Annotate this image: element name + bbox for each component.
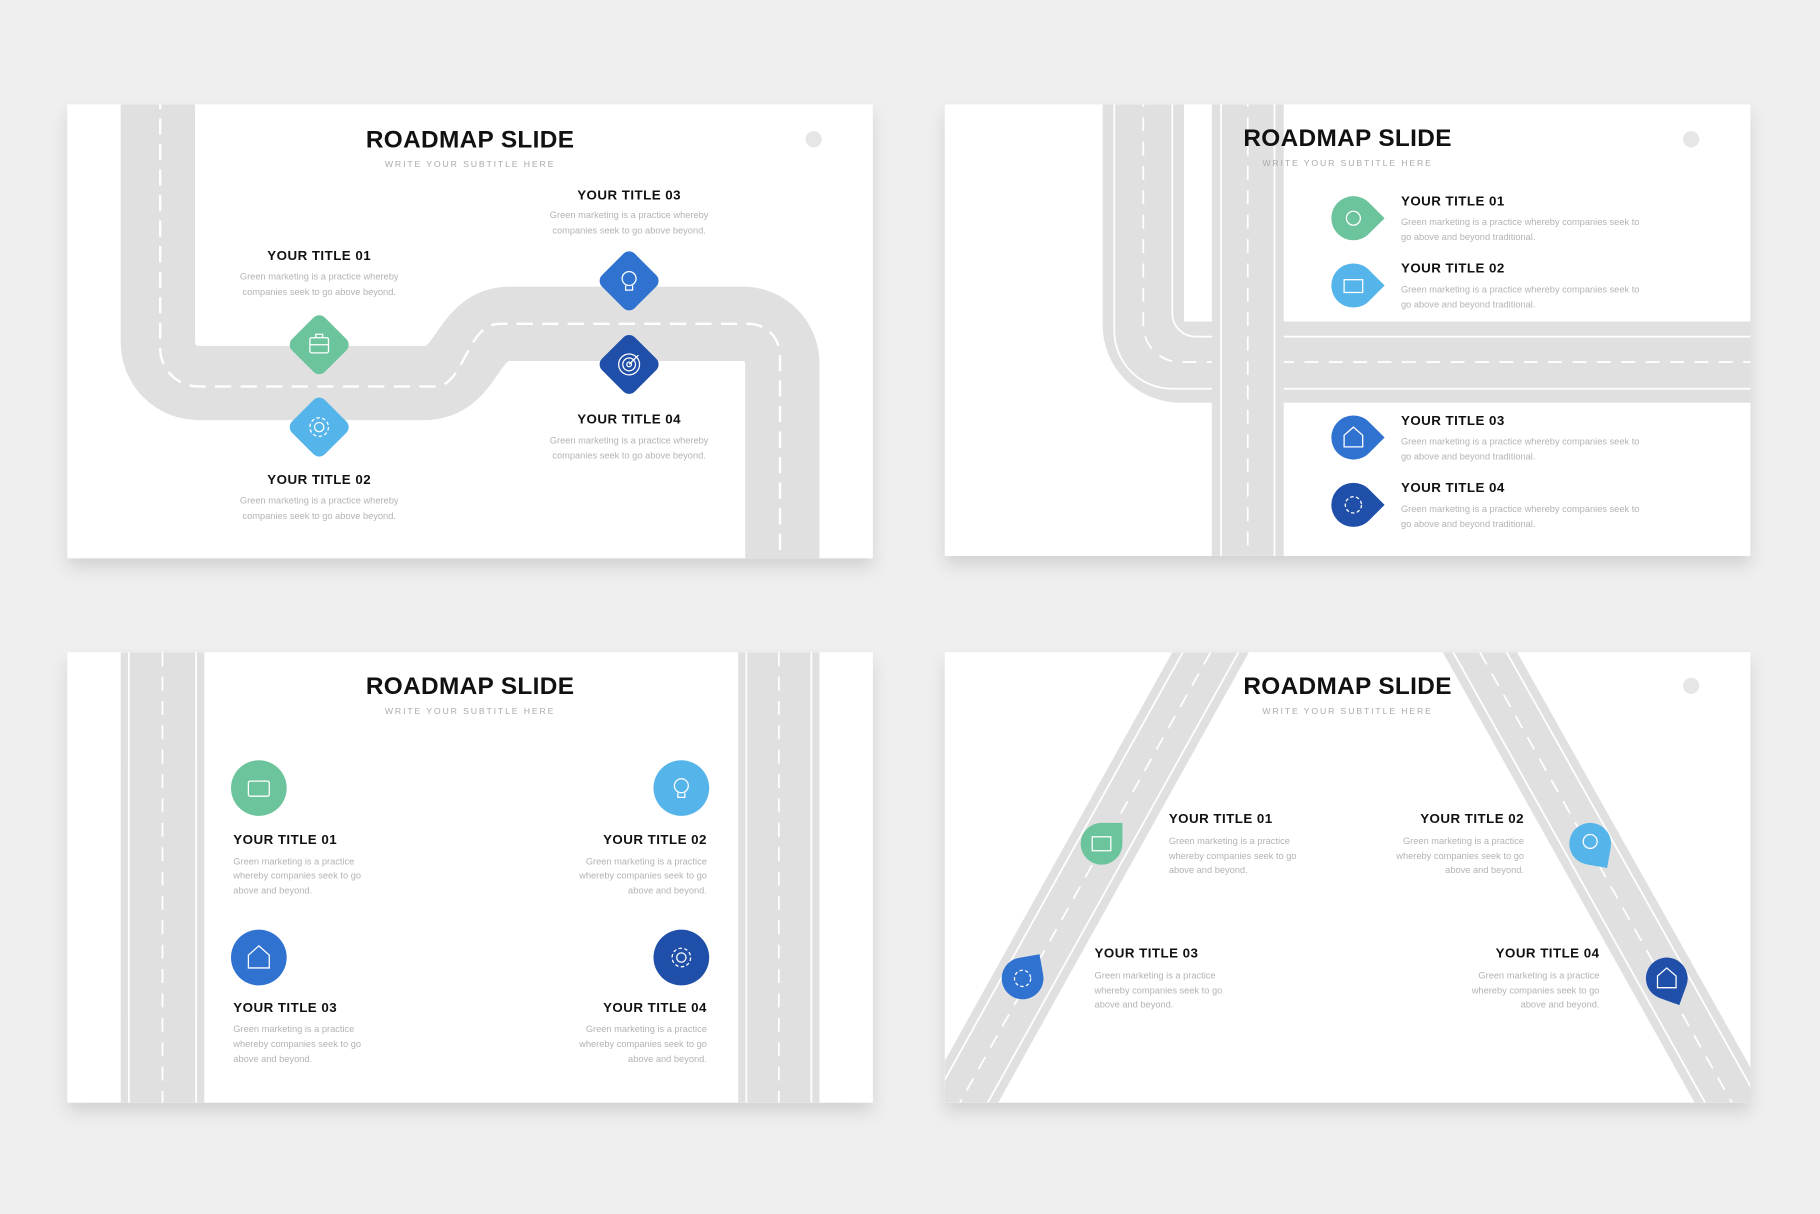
- text: title 02: above and beyond.: [1445, 865, 1524, 875]
- subtitle: WRITE YOUR SUBTITLE HERE: [1262, 158, 1433, 168]
- text: title 01: YOUR TITLE 01: [1169, 811, 1273, 826]
- icon: light blue circle: [653, 760, 709, 816]
- text: title 03: [550, 188, 709, 235]
- icon: light blue pin: [1322, 254, 1385, 317]
- icon: green pin: [1322, 187, 1385, 249]
- text: title 04: whereby companies seek to go: [1471, 985, 1599, 995]
- text: title 04: above and beyond.: [1521, 999, 1599, 1009]
- text: title 02: whereby companies seek to go: [1395, 851, 1524, 861]
- text: title 02: whereby companies seek to go: [578, 871, 707, 881]
- text: title 04: Green marketing is a practice: [586, 1024, 707, 1034]
- icon: light blue diamond gear: [286, 394, 352, 460]
- text: title 04: YOUR TITLE 04: [1401, 480, 1505, 495]
- icon: green diamond briefcase: [286, 312, 352, 378]
- text: title 01: YOUR TITLE 01: [1401, 193, 1505, 208]
- text: title 04: [1471, 946, 1600, 1009]
- text: title 03: Green marketing is a practice: [233, 1024, 354, 1034]
- icon: light blue pin: [1566, 820, 1614, 868]
- page number: [806, 131, 822, 147]
- page number: [1683, 131, 1699, 147]
- text: title 01: Green marketing is a practice: [1169, 836, 1290, 846]
- panel: slide 3 parallel roads: [67, 652, 873, 1103]
- text: title 02: companies seek to go above beyond.: [242, 511, 396, 521]
- text: title 04: YOUR TITLE 04: [603, 1000, 707, 1015]
- icon: blue pin: [998, 954, 1047, 1003]
- text: title 04: Green marketing is a practice: [1478, 970, 1599, 980]
- text: title 04: [550, 412, 709, 460]
- text: title 02: YOUR TITLE 02: [267, 472, 371, 487]
- text: title 01: go above and beyond traditional.: [1401, 232, 1535, 242]
- text: title 01: above and beyond.: [233, 886, 312, 896]
- text: title 03: companies seek to go above beyond.: [552, 225, 706, 235]
- text: title 03: above and beyond.: [233, 1054, 312, 1064]
- text: title 01: whereby companies seek to go: [232, 871, 361, 881]
- panel: slide 2 crossing roads: [945, 93, 1764, 569]
- text: title 04: Green marketing is a practice whereby: [550, 435, 709, 445]
- text: title 04: go above and beyond traditional.: [1401, 519, 1535, 529]
- text: title 03: Green marketing is a practice whereby companies seek to: [1401, 437, 1639, 447]
- subtitle: WRITE YOUR SUBTITLE HERE: [385, 706, 555, 716]
- text: title 03: whereby companies seek to go: [1094, 985, 1222, 995]
- text: title 02: Green marketing is a practice: [586, 857, 707, 867]
- road: winding: [158, 93, 782, 569]
- text: title 01: [1168, 811, 1297, 875]
- panel: slide 4 diagonal roads: [922, 652, 1770, 1103]
- text: title 01: Green marketing is a practice whereby: [240, 272, 399, 282]
- title: ROADMAP SLIDE: [1243, 125, 1452, 152]
- text: title 04: companies seek to go above beyond.: [552, 450, 706, 460]
- text: title 03: [232, 1000, 361, 1064]
- road: left and right vertical: [121, 652, 819, 1103]
- icon: dark blue diamond target: [596, 332, 662, 397]
- icon: blue circle: [231, 930, 287, 985]
- text: title 03: whereby companies seek to go: [232, 1039, 361, 1049]
- text: title 02: above and beyond.: [628, 886, 707, 896]
- text: title 03: Green marketing is a practice: [1095, 970, 1216, 980]
- text: title 01: companies seek to go above beyond.: [242, 287, 396, 297]
- text: title 02: [1395, 811, 1524, 875]
- title: ROADMAP SLIDE: [1243, 673, 1452, 700]
- text: title 01: above and beyond.: [1169, 865, 1248, 875]
- text: title 02: [240, 472, 399, 521]
- text: title 02: YOUR TITLE 02: [603, 832, 707, 847]
- title: ROADMAP SLIDE: [366, 673, 574, 700]
- page number: [1683, 678, 1699, 694]
- road: diagonals: [922, 652, 1770, 1103]
- text: title 02: Green marketing is a practice whereby: [240, 496, 399, 506]
- text: title 01: YOUR TITLE 01: [233, 832, 337, 847]
- text: title 01: Green marketing is a practice whereby companies seek to: [1401, 217, 1639, 227]
- text: title 02: [578, 832, 707, 896]
- text: title 01: [232, 832, 361, 896]
- text: title 04: above and beyond.: [628, 1054, 707, 1064]
- text: title 02: go above and beyond traditional.: [1401, 300, 1535, 310]
- icon: green circle: [231, 760, 287, 816]
- subtitle: WRITE YOUR SUBTITLE HERE: [385, 159, 555, 169]
- title: ROADMAP SLIDE: [366, 126, 574, 153]
- text: title 04: [1401, 480, 1639, 529]
- text: title 01: Green marketing is a practice: [233, 857, 354, 867]
- text: title 01: whereby companies seek to go: [1168, 851, 1297, 861]
- text: title 03: Green marketing is a practice whereby: [550, 210, 709, 220]
- text: title 01: YOUR TITLE 01: [267, 248, 371, 263]
- icon: green pin: [1081, 823, 1122, 865]
- text: title 04: Green marketing is a practice whereby companies seek to: [1401, 504, 1639, 514]
- text: title 04: YOUR TITLE 04: [577, 412, 681, 427]
- text: title 01: [240, 248, 399, 297]
- text: title 03: YOUR TITLE 03: [233, 1000, 337, 1015]
- text: title 04: whereby companies seek to go: [578, 1039, 707, 1049]
- text: title 02: YOUR TITLE 02: [1401, 261, 1505, 276]
- text: title 04: [578, 1000, 707, 1064]
- icon: dark blue pin: [1322, 474, 1385, 536]
- text: title 03: YOUR TITLE 03: [577, 188, 681, 203]
- text: title 03: [1401, 413, 1639, 462]
- icon: dark blue pin: [1640, 952, 1694, 1005]
- icon: blue pin: [1322, 406, 1385, 469]
- text: title 03: [1094, 946, 1222, 1009]
- text: title 03: YOUR TITLE 03: [1401, 413, 1505, 428]
- icon: dark blue circle: [653, 930, 709, 985]
- text: title 01: [1401, 193, 1639, 242]
- text: title 02: Green marketing is a practice whereby companies seek to: [1401, 284, 1639, 294]
- icon: blue diamond bulb: [596, 248, 662, 314]
- text: title 02: Green marketing is a practice: [1403, 836, 1524, 846]
- subtitle: WRITE YOUR SUBTITLE HERE: [1262, 706, 1433, 716]
- road: crossing: [1114, 93, 1764, 569]
- text: title 02: YOUR TITLE 02: [1420, 811, 1524, 826]
- text: title 02: [1401, 261, 1639, 310]
- text: title 03: above and beyond.: [1095, 999, 1173, 1009]
- text: title 03: go above and beyond traditional.: [1401, 452, 1535, 462]
- text: title 04: YOUR TITLE 04: [1496, 946, 1600, 961]
- panel: slide 1 winding road: [67, 93, 873, 569]
- text: title 03: YOUR TITLE 03: [1095, 946, 1198, 961]
